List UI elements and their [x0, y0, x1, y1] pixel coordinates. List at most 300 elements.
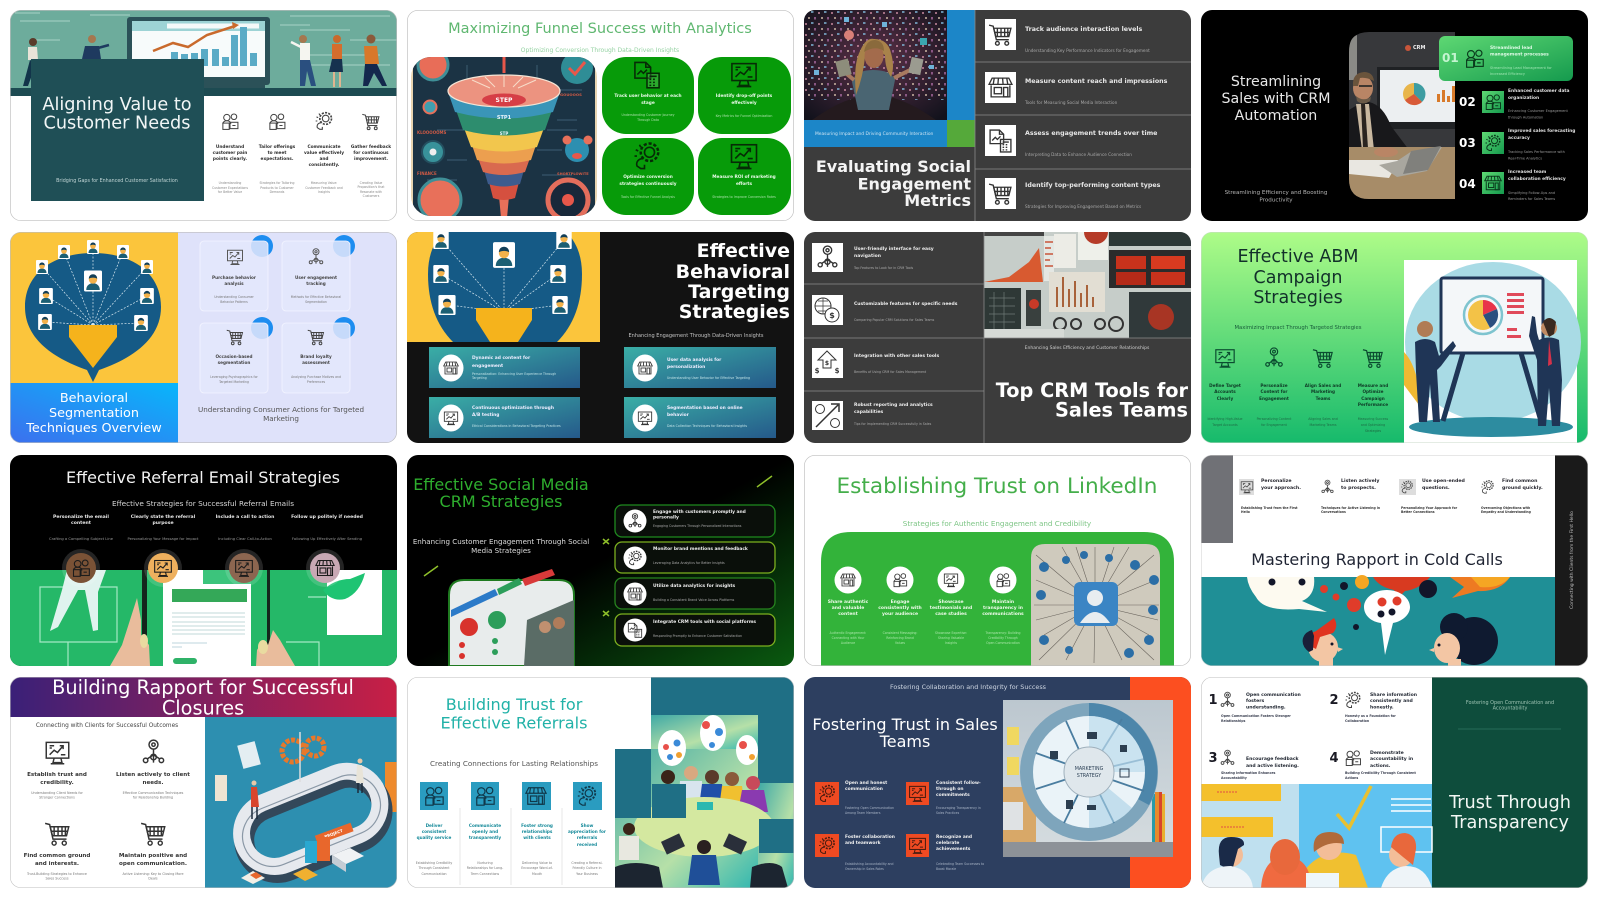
practice 2: Listen actively to client — [116, 772, 190, 778]
strategy box 4 — [624, 397, 776, 438]
point 3: and active listening. — [1246, 763, 1299, 769]
value 1: Audience — [841, 641, 855, 645]
four strategies: Include a call to action — [216, 514, 274, 520]
highlighted step 01: Streamlining Lead Management for — [1490, 66, 1552, 70]
tip 3: Better Connections — [1401, 510, 1435, 514]
right strip with vertical caption — [1555, 455, 1588, 666]
practice 1: Establish trust and — [27, 772, 87, 778]
point 2: consistently and — [1370, 698, 1413, 704]
value 4: Maintain — [992, 600, 1014, 605]
value 4: transparency in — [983, 605, 1023, 611]
value 2 — [878, 566, 922, 645]
funnel image: FINANCE — [417, 171, 437, 176]
photo: executive at laptop with CRM dashboard — [1349, 32, 1455, 199]
campaign steps: Identifying High-Value — [1207, 417, 1243, 421]
side panel: Accountability — [1493, 706, 1527, 712]
glass tile 1 — [200, 235, 273, 311]
illustration: team around a growth chart — [10, 10, 397, 96]
subtitle: Productivity — [1259, 198, 1293, 204]
feature tile 4 — [698, 138, 791, 215]
title: Effective — [697, 240, 790, 262]
value 4: communications — [982, 611, 1024, 617]
subtitle: Connecting with Clients for Successful Outcomes — [36, 723, 178, 729]
illustration: audience funnel — [10, 232, 178, 384]
four value points: for Better Value — [218, 190, 242, 194]
network image — [1031, 544, 1160, 666]
strategy row 4 — [615, 614, 775, 646]
card: Establishing Trust on LinkedIn — [804, 455, 1191, 666]
feature tile 1 — [602, 57, 694, 134]
practice 1: Understanding Client Needs for — [31, 791, 83, 795]
column 3: relationships — [522, 829, 553, 834]
practice 3: Sales Success — [45, 876, 69, 880]
four strategies: Clearly state the referral — [131, 515, 195, 520]
feature tile 4: Strategies to Improve Conversion Rates — [712, 195, 776, 199]
strategy box 2 — [624, 347, 776, 388]
illustration: team around a table — [615, 677, 794, 888]
point 1: fosters — [1246, 698, 1264, 704]
campaign steps: Clearly — [1217, 396, 1233, 401]
campaign steps: Accounts — [1214, 389, 1236, 394]
feature tile 3 — [602, 138, 694, 215]
title: CRM Strategies — [440, 492, 562, 511]
campaign steps: Strategies — [1365, 429, 1381, 433]
subtitle: Marketing — [263, 414, 299, 423]
illustration: two people talking — [1201, 575, 1555, 666]
feature tile 2: Identify drop-off points — [716, 94, 772, 99]
campaign steps: Define Target — [1209, 383, 1241, 388]
point 2: Share information — [1370, 693, 1417, 698]
step 04: Reminders for Sales Teams — [1508, 197, 1555, 201]
four value points: points clearly. — [213, 156, 247, 162]
strategy box 1: engagement — [472, 363, 503, 369]
practice 3: Establishing Accountability and — [845, 862, 893, 866]
feature tile 1: Track user behavior at each — [614, 94, 682, 99]
column 4: Your Business — [576, 872, 598, 876]
point 1: Relationships — [1221, 719, 1245, 723]
column 1: Communication — [421, 872, 447, 876]
practice 1 — [27, 742, 87, 800]
subtitle: Bridging Gaps for Enhanced Customer Satisfaction — [56, 178, 178, 184]
strategy row 2: Leveraging Data Analytics for Better Insights — [653, 561, 725, 565]
practice 1: credibility. — [40, 780, 74, 786]
glass tile 4: Brand loyalty — [300, 354, 332, 359]
step 02: organization — [1508, 95, 1539, 101]
value 1: Share authentic — [828, 600, 868, 605]
tip 1: Establishing Trust from the First — [1241, 506, 1298, 510]
tool row 3: Integration with other sales tools — [854, 353, 939, 359]
point 1: Open Communication Fosters Stronger — [1221, 714, 1291, 718]
practice 3: and interests. — [35, 861, 79, 867]
title: Metrics — [904, 191, 971, 210]
card: Building Trust for Effective Referrals — [407, 677, 794, 888]
column 3: Delivering Value to — [522, 861, 552, 865]
metric row 2 — [985, 72, 1168, 105]
four value points: customer pain — [213, 150, 247, 156]
point 4: Demonstrate — [1370, 751, 1404, 756]
four value points: Customers — [363, 194, 380, 198]
campaign steps: Personalizing Content — [1257, 417, 1291, 421]
column 1: Establishing Credibility — [416, 861, 452, 865]
title: Targeting — [688, 281, 790, 303]
funnel image: SHORTPLOWITE — [557, 172, 589, 176]
tip 3: Personalizing Your Approach for — [1401, 506, 1457, 510]
feature tile 1: stage — [641, 100, 655, 106]
value 2: Values — [895, 641, 905, 645]
column 3: Encourage Word-of- — [521, 866, 553, 870]
tip 2 — [1321, 478, 1380, 514]
subtitle: Fostering Collaboration and Integrity for Success — [890, 683, 1047, 691]
feature tile 1: Understanding Customer Journey — [621, 113, 675, 117]
step 02: Enhancing Customer Engagement — [1508, 109, 1568, 113]
tool row 3 — [812, 348, 939, 378]
four value points: Tailor offerings — [259, 145, 295, 150]
practice 1: communication — [845, 786, 883, 792]
title: Strategies — [1253, 288, 1343, 308]
tool row 3: $ — [815, 367, 820, 375]
column 3: with clients — [523, 835, 551, 840]
point 1: understanding. — [1246, 704, 1286, 710]
value 3: Showcase Expertise: — [935, 631, 967, 635]
four value points: Gather feedback — [351, 145, 391, 150]
title banner — [10, 676, 397, 720]
practice 3 — [815, 834, 895, 871]
strategy box 3: Ethical Considerations in Behavioral Targeting Practices — [472, 424, 561, 428]
four value points: value effectively — [304, 150, 344, 156]
subtitle: Creating Connections for Lasting Relationships — [430, 759, 598, 768]
four value points: Products to Customer — [260, 186, 294, 190]
glass tile 3: Targeted Marketing — [218, 380, 249, 384]
practice 2: Encouraging Transparency in — [936, 806, 981, 810]
funnel image: STEP — [496, 97, 513, 104]
value 1 — [828, 566, 869, 645]
card: Maximizing Funnel Success with Analytics — [407, 10, 794, 221]
strategy box 3: Continuous optimization through — [472, 406, 554, 411]
step 02 — [1459, 88, 1569, 120]
step 03: 03 — [1459, 136, 1476, 150]
feature tile 2 — [698, 57, 791, 134]
title: Top CRM Tools for — [996, 379, 1188, 402]
card: Mastering Rapport in Cold Calls — [1201, 455, 1588, 666]
tip 4: Overcoming Objections with — [1481, 506, 1530, 510]
card: Evaluating Social Engagement Metrics — [804, 10, 1191, 221]
glass tile 4: Analyzing Purchase Motives and — [291, 375, 341, 379]
glass tile 2: tracking — [306, 281, 326, 286]
practice 3: and teamwork — [845, 840, 881, 846]
sparkles — [424, 476, 772, 616]
glass tile 2: Methods for Effective Behavioral — [291, 295, 341, 299]
column 4: Show — [581, 823, 593, 828]
card: Effective Social Media CRM Strategies — [407, 455, 794, 666]
title: Evaluating Social — [816, 157, 971, 176]
practice 4 — [906, 834, 984, 871]
four value points: Demands — [270, 190, 285, 194]
four strategies: Crafting a Compelling Subject Line — [49, 537, 114, 541]
column 2: Relationships for Long- — [467, 866, 503, 870]
practice 4 — [119, 823, 187, 880]
subtitle: Measuring Impact and Driving Community Interaction — [815, 131, 934, 137]
illustration: office meeting — [1201, 784, 1432, 888]
title: Mastering Rapport in Cold Calls — [1251, 550, 1503, 569]
campaign steps: Teams — [1316, 396, 1331, 401]
illustration: marketing strategy wheel: STRATEGY — [1077, 773, 1101, 779]
metric row 1 — [985, 19, 1150, 53]
value 1: Authentic Engagement: — [830, 631, 866, 635]
tip 4: Find common — [1502, 479, 1537, 484]
point 2: Collaboration — [1345, 719, 1370, 723]
title block: Behavioral — [60, 391, 128, 406]
four strategies: Follow up politely if needed — [291, 514, 363, 520]
title: Campaign — [1254, 268, 1342, 288]
strategy box 3 — [429, 397, 580, 438]
subtitle: Maximizing Impact Through Targeted Strategies — [1234, 325, 1362, 331]
title: Sales with CRM — [1222, 91, 1330, 107]
title: Effective Referral Email Strategies — [66, 468, 340, 487]
point 2: Honesty as a Foundation for — [1345, 714, 1396, 718]
strategy box 2: User data analysis for — [667, 358, 721, 363]
point 2: honestly. — [1370, 704, 1394, 710]
campaign steps: Engagement — [1259, 396, 1289, 401]
subtitle: Effective Strategies for Successful Referral Emails — [112, 499, 294, 508]
value 2: Engage — [891, 600, 909, 605]
four strategies: Including Clear Call-to-Action — [218, 537, 272, 541]
column 3: Mouth — [532, 872, 542, 876]
practice 2 — [116, 740, 190, 800]
strategy box 4: Segmentation based on online — [667, 406, 743, 411]
title block: Techniques Overview — [25, 421, 162, 436]
column 1: Deliver — [426, 823, 442, 828]
title: Establishing Trust on LinkedIn — [837, 474, 1157, 499]
title: Aligning Value to — [42, 95, 192, 115]
strategy row 1: Engage with customers promptly and — [653, 510, 746, 515]
photo: dashboard collage — [984, 232, 1191, 338]
title banner: Closures — [162, 696, 244, 720]
card: Effective ABM Campaign Strategies — [1201, 232, 1588, 443]
four strategies — [49, 514, 363, 541]
point 2: 2 — [1329, 693, 1339, 708]
title: Engagement — [858, 174, 971, 194]
practice 2: Consistent follow- — [936, 781, 981, 786]
point 2 — [1329, 692, 1417, 723]
side panel: Trust Through — [1449, 793, 1571, 813]
glass tile 2: User engagement — [295, 275, 337, 280]
step 04: 04 — [1459, 177, 1476, 191]
four value points: Insights — [318, 190, 330, 194]
card: Streamlining Sales with CRM Automation — [1201, 10, 1588, 221]
four value points: Communicate — [307, 145, 341, 150]
practice 4: Active Listening: Key to Closing More — [122, 872, 184, 876]
four value points: improvement. — [354, 156, 388, 162]
point 3: Accountability — [1221, 776, 1248, 780]
campaign steps: for Engagement — [1261, 423, 1288, 427]
campaign steps: Campaign — [1361, 396, 1385, 401]
strategy row 3: Building a Consistent Brand Voice Across Platforms — [653, 598, 735, 602]
strategy row 2: Monitor brand mentions and feedback — [653, 546, 748, 552]
tip 3: questions. — [1422, 485, 1450, 491]
tip 4: Empathy and Understanding — [1481, 510, 1531, 514]
campaign steps: Optimize — [1362, 389, 1384, 394]
card: Top CRM Tools for Sales Teams — [804, 232, 1191, 443]
metric row 1: Track audience interaction levels — [1025, 26, 1143, 33]
highlighted step 01: Increased Efficiency — [1490, 72, 1525, 76]
value 1: Connecting with Your — [832, 636, 865, 640]
four value points: Understand — [216, 145, 244, 150]
metric row 3 — [985, 125, 1157, 157]
title: Streamlining — [1231, 74, 1321, 90]
glass tile 3: Occasion-based — [215, 354, 253, 359]
column 2: Communicate — [469, 823, 501, 828]
feature tile 3: strategies continuously — [619, 181, 677, 187]
value 4: Credibility Through — [988, 636, 1018, 640]
value 3: testimonials and — [930, 605, 972, 611]
glass tile 4: assessment — [302, 360, 330, 365]
value 3: Sharing Valuable — [938, 636, 964, 640]
tip 4 — [1481, 478, 1543, 514]
title: Effective Social Media — [413, 475, 589, 494]
practice 4: Recognize and — [936, 835, 972, 840]
title: Behavioral — [676, 261, 790, 283]
four value points: and — [319, 156, 329, 162]
right strip with vertical caption: Connecting with Clients from the First Hello — [1569, 511, 1575, 609]
strategy row 4: Responding Promptly to Enhance Customer Satisfaction — [653, 634, 742, 638]
point 3: Encourage feedback — [1246, 757, 1299, 762]
tip 1 — [1239, 478, 1301, 514]
tool row 4 — [812, 401, 933, 430]
point 4 — [1329, 750, 1416, 780]
step 04: collaboration efficiency — [1508, 176, 1566, 182]
value 3: Showcase — [938, 600, 964, 605]
tool row 2: Customizable features for specific needs — [854, 301, 958, 307]
highlighted step 01: 01 — [1442, 51, 1459, 65]
tip 1: Hello — [1241, 510, 1250, 514]
title: Building Trust for — [446, 695, 582, 714]
glass tile 4: Preferences — [307, 380, 325, 384]
column 1 — [416, 782, 452, 876]
step 02: through Automation — [1508, 116, 1543, 120]
title: Effective ABM — [1238, 247, 1358, 267]
strategy box 1: Dynamic ad content for — [472, 356, 530, 361]
title banner: Building Rapport for Successful — [52, 676, 354, 699]
tool row 1 — [812, 243, 934, 272]
practice 3: Ownership in Sales Roles — [845, 867, 884, 871]
strategy row 2 — [615, 542, 775, 573]
point 3 — [1208, 750, 1300, 780]
practice 4: Boost Morale — [936, 867, 956, 871]
strategy row 4: Integrate CRM tools with social platforms — [653, 619, 756, 625]
campaign steps: Aligning Sales and — [1308, 417, 1338, 421]
four value points: Understanding — [219, 181, 241, 185]
practice 1: Among Team Members — [845, 811, 881, 815]
title: Fostering Trust in Sales — [812, 715, 998, 734]
feature tile 3: Optimize conversion — [623, 175, 673, 180]
glass tile 1: Behavior Patterns — [220, 300, 248, 304]
tool row 2: Comparing Popular CRM Solutions for Sales Teams — [854, 318, 935, 322]
point 4: 4 — [1329, 751, 1339, 766]
title block — [10, 383, 178, 443]
point 3: Sharing Information Enhances — [1221, 771, 1275, 775]
column 4: Friendly Culture in — [572, 866, 602, 870]
value 1: content — [838, 611, 859, 617]
glass tile 3: Leveraging Psychographics for — [210, 375, 258, 379]
value 2: your audience — [882, 611, 918, 617]
feature tile 1: Through Data — [636, 118, 659, 122]
value 4: Open Communication — [986, 641, 1020, 645]
funnel image — [411, 50, 597, 221]
strategy row 1: personally — [653, 514, 679, 520]
tip 4: ground quickly. — [1502, 485, 1543, 491]
strategy box 1: Personalization: Enhancing User Experience Through — [472, 372, 556, 376]
practice 4: Celebrating Team Successes to — [936, 862, 984, 866]
practice 4: achievements — [936, 846, 971, 852]
tool row 2: $ — [829, 311, 835, 320]
point 1: 1 — [1208, 693, 1218, 708]
value 3 — [930, 566, 972, 645]
practice 3 — [24, 823, 90, 880]
icons row — [223, 113, 379, 130]
value 2: consistently with — [878, 605, 922, 611]
four value points: Strategies for Tailoring — [260, 181, 294, 185]
subtitle: Enhancing Customer Engagement Through Social — [413, 537, 589, 546]
campaign steps — [1207, 383, 1389, 433]
point 4: actions. — [1370, 763, 1391, 769]
column 4 — [568, 782, 607, 876]
four value points: to meet — [268, 150, 286, 156]
four value points: Resonate with — [360, 190, 382, 194]
subtitle: Enhancing Engagement Through Data-Driven Insights — [628, 333, 764, 339]
metric row 4: Strategies for Improving Engagement Based on Metrics — [1025, 204, 1141, 209]
glass tile 2 — [282, 235, 355, 311]
point 3: 3 — [1208, 751, 1218, 766]
tool row 1: User-friendly interface for easy — [854, 247, 934, 252]
practice 1: Fostering Open Communication — [845, 806, 894, 810]
title block: Segmentation — [49, 406, 139, 421]
step 03 — [1459, 128, 1575, 160]
feature tile 4: Measure ROI of marketing — [712, 175, 776, 180]
campaign steps: Marketing Teams — [1310, 423, 1337, 427]
strategy row 3: Utilize data analytics for insights — [653, 583, 735, 589]
practice 2: needs. — [142, 780, 164, 786]
value 2: Reinforcing Brand — [886, 636, 914, 640]
tool row 3: Benefits of Using CRM for Sales Management — [854, 370, 927, 374]
column 4: Creating a Referral- — [571, 861, 603, 865]
highlighted step 01: Streamlined lead — [1490, 46, 1532, 51]
subtitle: Understanding Consumer Actions for Targeted — [198, 405, 364, 414]
practice 4: Maintain positive and — [119, 853, 187, 859]
metric row 1: Understanding Key Performance Indicators for Engagement — [1025, 48, 1150, 53]
tool row 3: $ — [835, 367, 840, 375]
strategy row 1 — [615, 505, 775, 537]
practice 4: open communication. — [119, 861, 187, 867]
strategy box 1: Targeting — [471, 376, 487, 380]
value 3: Insights — [945, 641, 957, 645]
illustration: marketing strategy wheel: MARKETING — [1075, 767, 1103, 772]
four value points: Proposition's that — [358, 185, 385, 189]
card: Effective Referral Email Strategies — [10, 455, 397, 666]
four strategies: content — [71, 520, 92, 526]
subtitle: Streamlining Efficiency and Boosting — [1225, 190, 1327, 196]
four value points: Customer Feedback and — [305, 186, 343, 190]
campaign steps: Marketing — [1311, 389, 1335, 394]
metric row 4: Identify top-performing content types — [1025, 182, 1161, 189]
highlighted step 01: management processes — [1490, 52, 1549, 58]
four value points — [212, 144, 391, 198]
four value points: for continuous — [353, 150, 389, 156]
practice 2: commitments — [936, 792, 970, 798]
tip 1: your approach. — [1261, 485, 1301, 491]
funnel image: GOUOOOS — [560, 92, 582, 97]
strategy box 4: behavior — [667, 412, 690, 418]
four value points: expectations. — [261, 156, 294, 162]
